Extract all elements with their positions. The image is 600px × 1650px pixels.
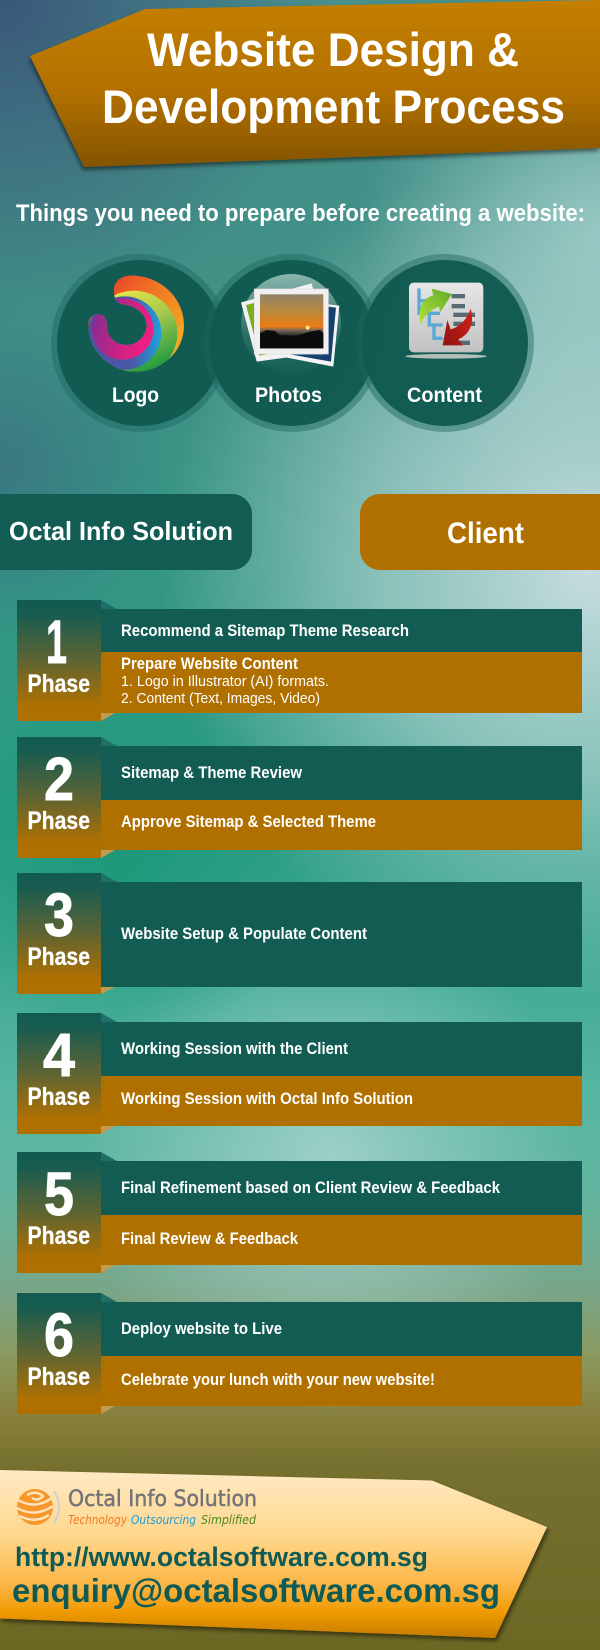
phase badge [17,600,101,721]
title: Development Process [102,80,565,133]
bar: client task: Prepare Website Content [121,655,298,673]
phase 3 [17,873,582,994]
bar: Octal task: Website Setup & Populate Content [121,925,367,943]
phase badge [17,873,101,994]
phase badge: Phase [28,1363,90,1391]
label: Content: Content [407,384,482,407]
bar: Octal task: Working Session with the Client [121,1040,348,1058]
phase badge: 5 [44,1160,74,1228]
phase badge: Phase [28,670,90,698]
phase badge: 1 [46,608,67,676]
panel: items to prepare [51,254,534,432]
footer banner [0,1470,547,1638]
bar: client task: Celebrate your lunch with your new website! [121,1371,435,1389]
bar: client task [101,652,582,713]
bar: client task: Approve Sitemap & Selected Theme [121,813,376,831]
bar: client task: 1. Logo in Illustrator (AI) formats. [121,673,329,690]
bar: Octal task [101,746,582,800]
column header: Octal Info Solution [0,494,252,570]
bar: Octal task: Sitemap & Theme Review [121,764,302,782]
circle: photos [203,254,381,432]
bar: Octal task [101,1161,582,1215]
bar: client task [101,800,582,850]
icon: photos [241,274,341,374]
tagline: Technology [68,1513,128,1527]
phase badge: 3 [44,881,74,949]
title banner [30,0,600,167]
bar: Octal task [101,882,582,987]
icon: content [405,283,487,359]
phase 2 [17,737,582,858]
phase badge: Phase [28,807,90,835]
label: Photos: Photos [255,384,322,407]
title: Website Design & [147,23,519,76]
bar: Octal task [101,609,582,652]
bar: client task [101,1356,582,1406]
column header: Client [360,494,600,570]
phase badge [17,1293,101,1414]
phase badge: 6 [44,1301,74,1369]
bar: Octal task: Deploy website to Live [121,1320,282,1338]
bar: Octal task [101,1022,582,1076]
phase 4 [17,1013,582,1134]
label: Logo: Logo [112,384,159,407]
phase badge [17,1013,101,1134]
company name: Octal Info Solution [68,1487,257,1512]
title [102,23,565,133]
circle: logo [51,254,229,432]
email: enquiry@octalsoftware.com.sg [12,1572,500,1609]
bar: client task [101,1215,582,1265]
phase badge: Phase [28,943,90,971]
bar: client task: Working Session with Octal Info Solution [121,1090,413,1108]
column header: Octal Info Solution: Octal Info Solution [9,516,233,546]
bar: client task [101,1076,582,1126]
phase badge: Phase [28,1083,90,1111]
phase badge: 4 [43,1021,75,1089]
website url: http://www.octalsoftware.com.sg [15,1542,428,1572]
phase badge [17,1152,101,1273]
bar: Octal task: Final Refinement based on Client Review & Feedback [121,1179,501,1197]
bar: Octal task [101,1302,582,1356]
tagline: Simplified [201,1513,256,1527]
phase 6 [17,1293,582,1414]
bar: client task: 2. Content (Text, Images, Video) [121,690,320,707]
bar: Octal task: Recommend a Sitemap Theme Research [121,622,409,640]
phase badge [17,737,101,858]
icon: logo spiral [88,276,184,372]
bar: client task: Final Review & Feedback [121,1230,299,1248]
circle: content [356,254,534,432]
tagline: Outsourcing [131,1513,196,1527]
icon: company globe [17,1489,59,1525]
phase badge: Phase [28,1222,90,1250]
phase badge: 2 [44,745,74,813]
phase 5 [17,1152,582,1273]
tagline [68,1513,256,1527]
column header: Client: Client [447,517,524,550]
phase 1 [17,600,582,721]
